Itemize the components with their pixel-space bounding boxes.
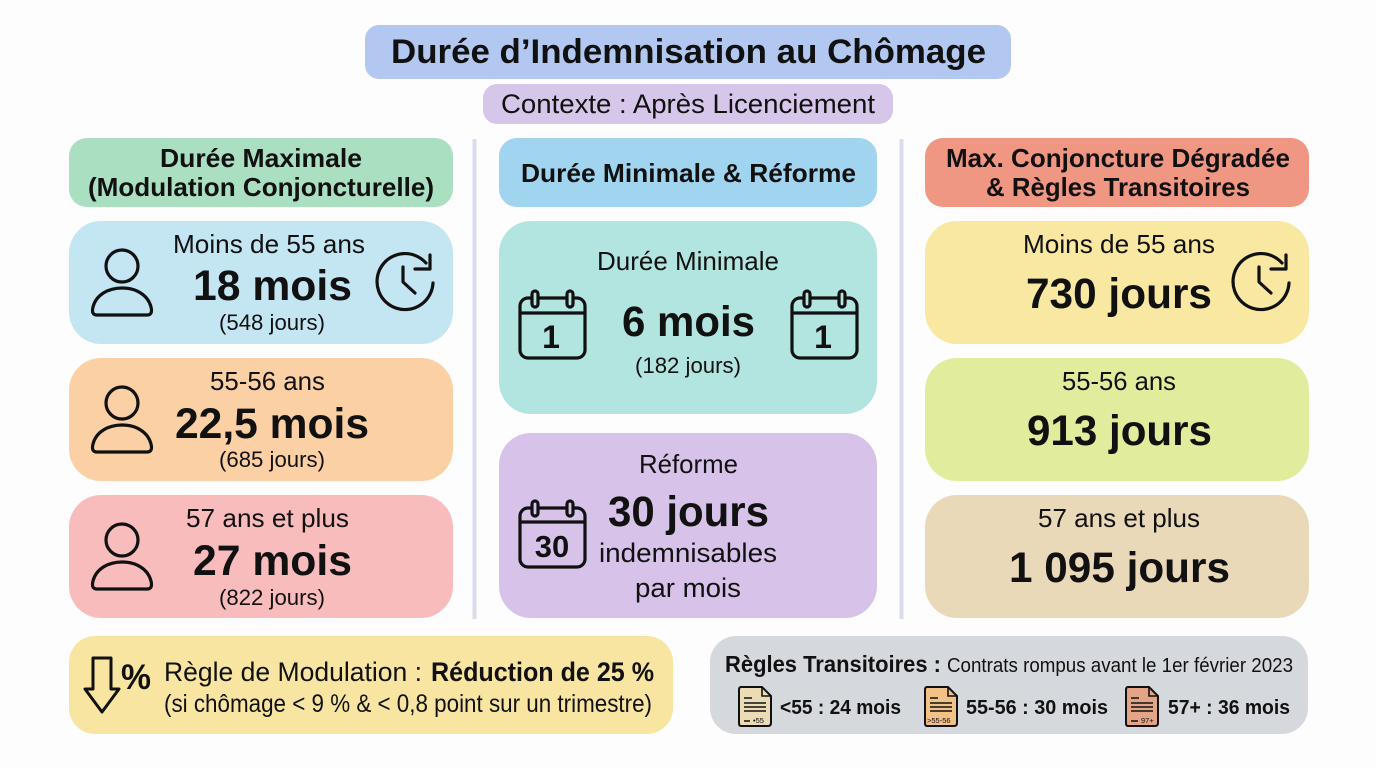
card: 57 ans et plus, 1 095 jours: 1 095 jours [1009,544,1230,592]
icon: calendar left: 1 [542,319,560,355]
icon: calendar left [520,291,585,358]
subtitle: Contexte : Après Licenciement [501,89,876,119]
icon: calendar right: 1 [814,319,832,355]
panel: règles transitoires: Règles Transitoires : [725,651,941,677]
icon: document 57+: 97+ [1141,716,1154,725]
card: moins de 55 ans, 730 jours [925,221,1309,344]
card: 57 ans et plus, 1 095 jours: 57 ans et plus [1038,503,1200,533]
icon: person [92,387,152,452]
column: conjoncture dégradée [925,138,1309,618]
card: durée minimale, 6 mois: Durée Minimale [597,246,779,276]
subtitle [483,84,893,124]
icon: clock [377,254,433,310]
icon: down arrow with percent [85,658,151,712]
panel: règles transitoires [710,636,1308,734]
card: durée minimale, 6 mois: 6 mois [622,298,755,346]
icon: document under 55: •55 [753,716,764,725]
card: 55-56 ans, 913 jours: 913 jours [1027,407,1212,455]
card: 57 ans et plus, 27 mois: (822 jours) [219,585,325,610]
card: durée minimale, 6 mois [499,221,877,414]
icon: calendar 30 [520,501,585,567]
icon: person [92,524,152,589]
icon: document 55-56: >55-56 [927,716,951,725]
panel: règle de modulation: Réduction de 25 % [431,657,654,687]
heading: conjoncture dégradée: & Règles Transitoires [986,172,1250,202]
card: moins de 55 ans, 730 jours: 730 jours [1026,270,1212,318]
card: moins de 55 ans, 18 mois [69,221,453,344]
card: 57 ans et plus, 1 095 jours [925,495,1309,618]
card: 55-56 ans, 22,5 mois [69,358,453,481]
card: réforme, 30 jours [499,433,877,618]
icon: document 55-56 [925,687,957,726]
card: réforme, 30 jours: par mois [635,573,741,603]
title [365,25,1011,79]
icon: person [92,250,152,315]
heading: durée maximale [69,138,453,207]
icon: down arrow with percent: % [121,658,151,697]
heading: durée minimale et réforme: Durée Minimale & Réforme [521,158,856,188]
card: moins de 55 ans, 730 jours: Moins de 55 ans [1023,229,1215,259]
card: 55-56 ans, 22,5 mois: 22,5 mois [175,400,369,448]
heading: conjoncture dégradée: Max. Conjoncture Dégradée [946,143,1290,173]
card: 57 ans et plus, 27 mois [69,495,453,618]
column: durée minimale et réforme [499,138,877,618]
panel: règles transitoires: Contrats rompus avant le 1er février 2023 [947,655,1293,677]
panel: règle de modulation [69,636,673,734]
panel: règles transitoires: <55 : 24 mois [780,697,901,719]
card: durée minimale, 6 mois: (182 jours) [635,353,741,378]
card: 55-56 ans, 913 jours: 55-56 ans [1062,366,1176,396]
card: 57 ans et plus, 27 mois: 27 mois [193,537,352,585]
card: 55-56 ans, 913 jours [925,358,1309,481]
heading: durée maximale: Durée Maximale [160,143,362,173]
card: 55-56 ans, 22,5 mois: (685 jours) [219,447,325,472]
column: durée maximale [69,138,453,618]
heading: durée maximale: (Modulation Conjoncturelle) [88,172,434,202]
heading: conjoncture dégradée [925,138,1309,207]
card: moins de 55 ans, 18 mois: Moins de 55 ans [173,229,365,259]
icon: calendar 30: 30 [535,529,569,564]
panel: règle de modulation: (si chômage < 9 % & < 0,8 point sur un trimestre) [164,690,652,718]
panel: règles transitoires: 57+ : 36 mois [1168,697,1290,719]
card: moins de 55 ans, 18 mois: (548 jours) [219,310,325,335]
card: réforme, 30 jours: 30 jours [608,488,769,536]
card: réforme, 30 jours: indemnisables [599,538,777,568]
card: moins de 55 ans, 18 mois: 18 mois [193,262,352,310]
card: 55-56 ans, 22,5 mois: 55-56 ans [210,366,325,396]
icon: document under 55 [739,687,771,726]
card: 57 ans et plus, 27 mois: 57 ans et plus [186,503,349,533]
card: réforme, 30 jours: Réforme [639,449,738,479]
panel: règle de modulation: Règle de Modulation : [164,657,422,687]
heading: durée minimale et réforme [499,138,877,207]
icon: clock [1233,254,1289,310]
icon: calendar right [792,291,857,358]
panel: règles transitoires: 55-56 : 30 mois [966,697,1108,719]
icon: document 57+ [1126,687,1158,726]
title: Durée d’Indemnisation au Chômage [391,33,986,71]
